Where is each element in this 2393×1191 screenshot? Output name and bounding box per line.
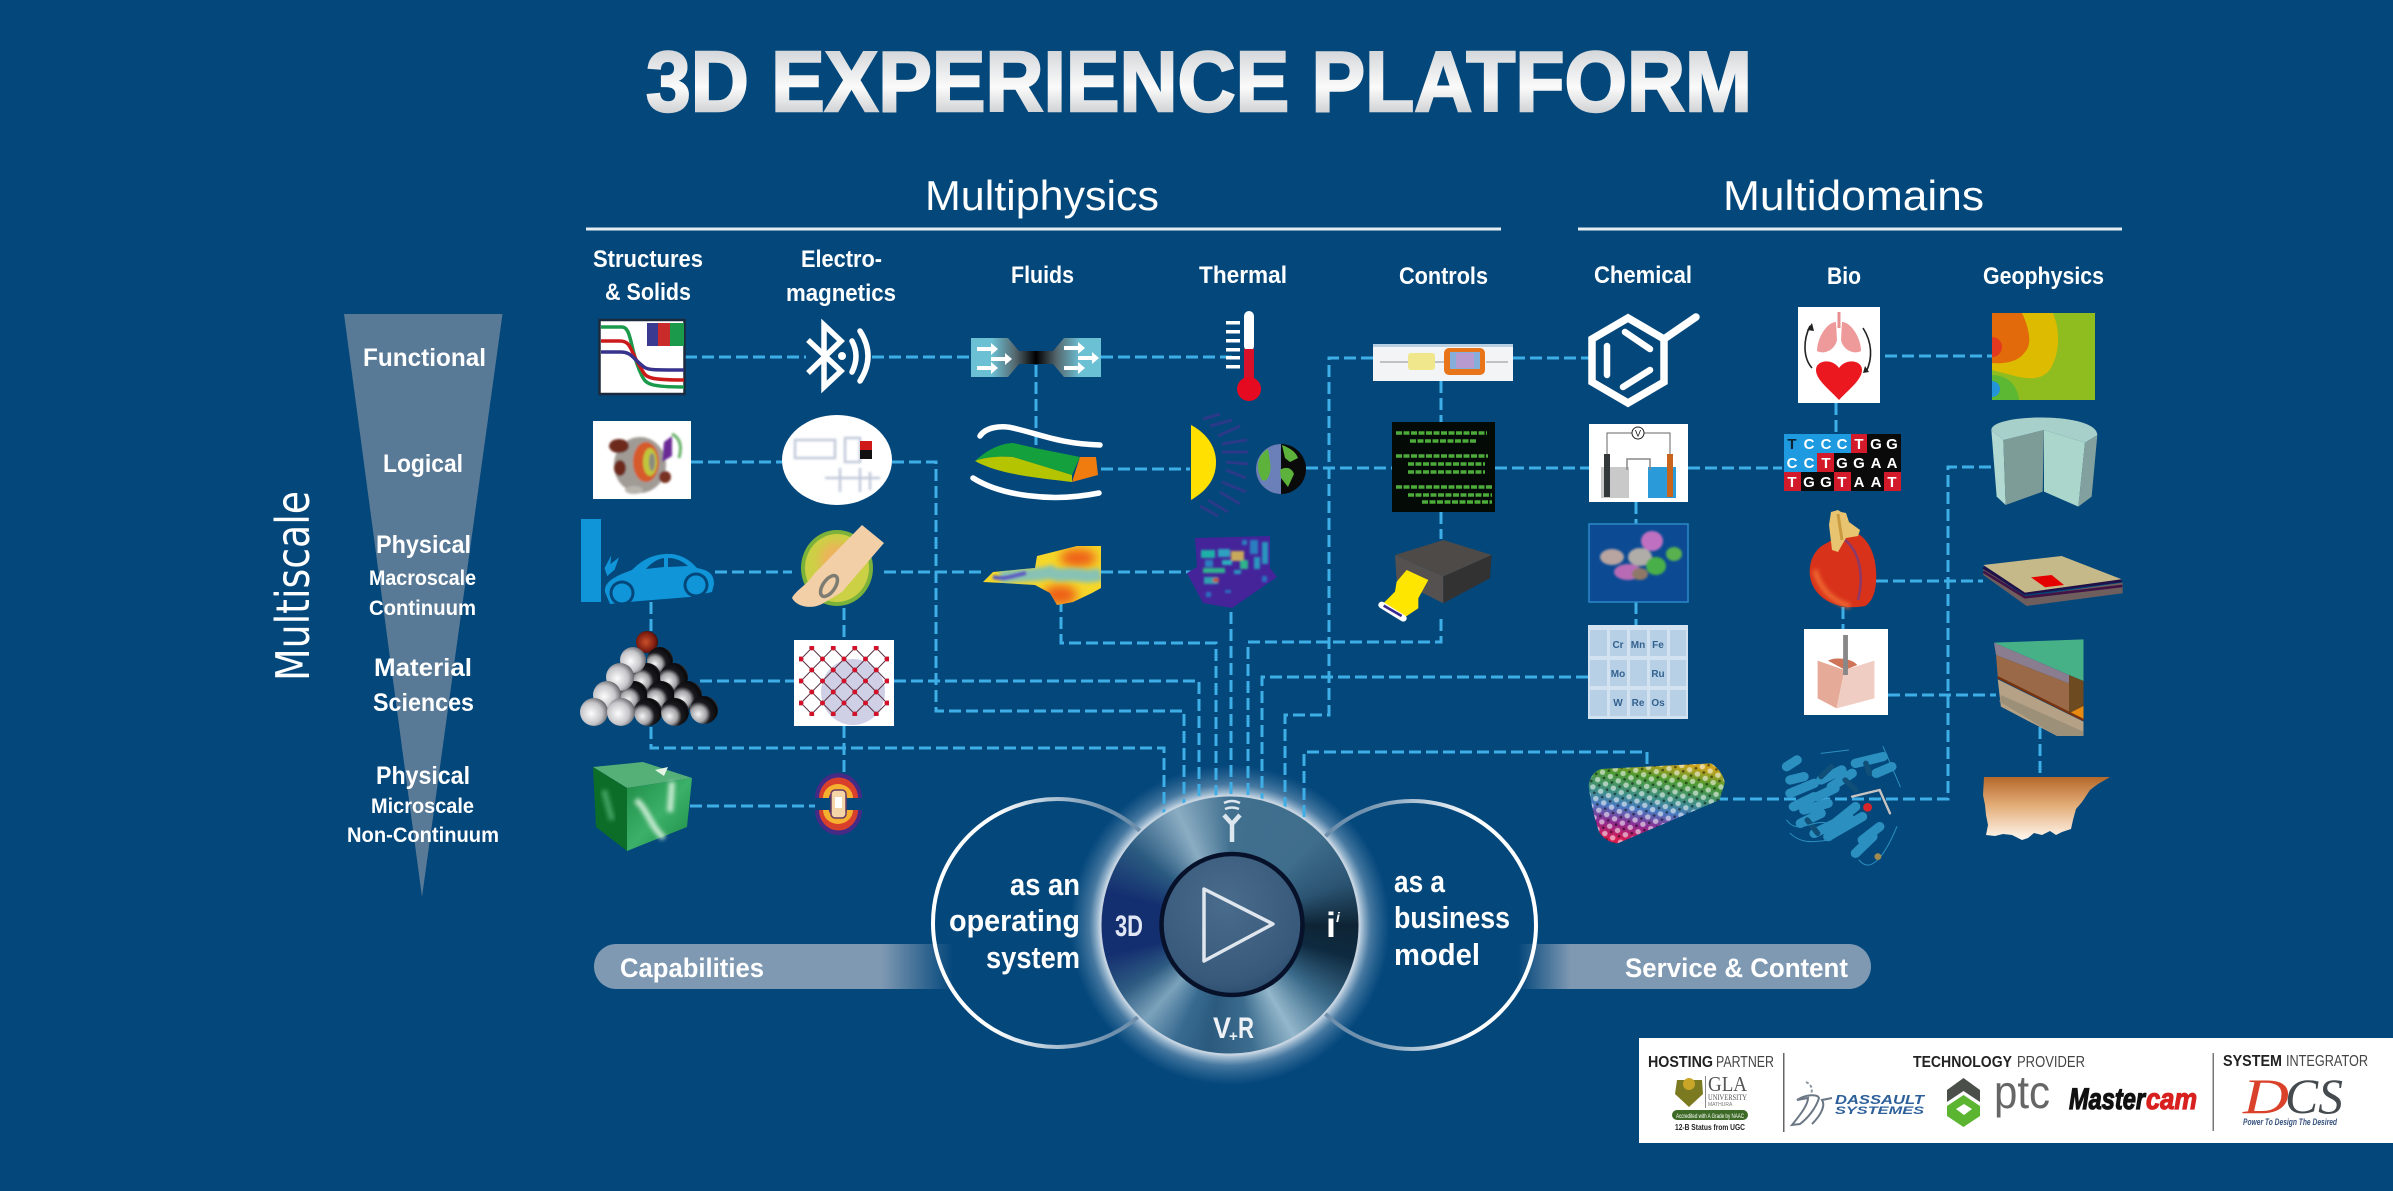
multiscale funnel with levels: Macroscale — [369, 567, 476, 590]
icon: DNA sequence: T — [1854, 436, 1864, 453]
icon: DNA sequence: G — [1803, 474, 1815, 491]
compass label V+R: + — [1229, 1028, 1238, 1045]
logo: Mastercam: Master — [2069, 1083, 2147, 1116]
column headers: magnetics — [786, 280, 896, 307]
icon: structures chart — [600, 320, 684, 394]
compass label iI — [1326, 906, 1341, 945]
icon: periodic table: Mo — [1611, 669, 1625, 680]
hosting partner heading: PARTNER — [1716, 1054, 1774, 1071]
system integrator heading: SYSTEM — [2223, 1053, 2282, 1070]
icon: sphere pyramid — [580, 631, 718, 726]
hosting partner heading: HOSTING — [1648, 1054, 1713, 1071]
circle: as a business model — [1288, 801, 1536, 1049]
logo: GLA University: 12-B Status from UGC — [1675, 1122, 1745, 1132]
icon: electromagnetic lobes — [815, 773, 862, 835]
column headers: Chemical — [1594, 262, 1692, 289]
multiscale funnel with levels — [344, 314, 502, 897]
icon: copper terrain map — [1983, 777, 2110, 840]
dashed connectors — [651, 356, 2040, 822]
technology provider heading: TECHNOLOGY — [1913, 1054, 2013, 1071]
system integrator heading: INTEGRATOR — [2286, 1053, 2368, 1070]
column headers: Bio — [1827, 263, 1861, 290]
circle: as a business model: as a — [1394, 864, 1446, 899]
logo: GLA University: UNIVERSITY — [1708, 1093, 1747, 1102]
column headers: & Solids — [605, 279, 691, 306]
column headers: Fluids — [1011, 262, 1074, 289]
service and content pill — [1518, 944, 1871, 989]
compass glow — [1070, 765, 1390, 1085]
icon: electrochemical cell — [1589, 424, 1688, 502]
compass disc — [1100, 795, 1360, 1055]
icon: fluid nozzle — [971, 338, 1101, 377]
system integrator heading — [2223, 1053, 2368, 1070]
column headers: Controls — [1399, 263, 1488, 290]
compass label 3D: 3D — [1115, 910, 1143, 943]
circle: as a business model: business — [1394, 900, 1510, 935]
logo: Dassault Systemes: SYSTEMES — [1835, 1105, 1925, 1117]
multiscale funnel with levels: Sciences — [373, 689, 474, 717]
logo: DCS: D — [2242, 1068, 2289, 1124]
icon: thermometer — [1226, 311, 1261, 401]
partner logo panel — [1639, 1038, 2393, 1143]
circle: as an operating system — [933, 799, 1181, 1047]
icon: periodic table — [1588, 625, 1688, 719]
service and content pill: Service & Content — [1625, 953, 1848, 983]
icon: DNA sequence: A — [1871, 474, 1882, 491]
circle: as an operating system: system — [986, 940, 1080, 975]
icon: periodic table: Fe — [1652, 640, 1664, 651]
column headers: Geophysics — [1983, 263, 2104, 290]
icon: periodic table: Re — [1632, 698, 1645, 709]
icon: periodic table: W — [1613, 698, 1623, 709]
icon: geophysics heatmap — [1982, 313, 2095, 400]
icon: periodic table: Ru — [1651, 669, 1665, 680]
logo: ptc: ptc — [1994, 1066, 2050, 1118]
compass hub with play triangle — [1162, 854, 1302, 995]
icon: control block diagram — [1373, 344, 1513, 381]
icon: layered plate — [1983, 556, 2123, 606]
technology provider heading — [1913, 1054, 2085, 1071]
icon: green cube — [593, 762, 692, 851]
heading: Multidomains — [1578, 172, 2122, 230]
icon: DNA sequence: G — [1853, 455, 1865, 472]
logo: DCS — [2242, 1068, 2343, 1127]
icon: benzene — [1592, 317, 1696, 403]
icon: geology section — [1994, 639, 2084, 736]
icon: airfoil — [973, 427, 1100, 497]
icon: turbine white tile — [593, 421, 691, 499]
icon: DNA sequence — [1784, 434, 1901, 491]
compass label iI: i — [1326, 906, 1336, 945]
logo: GLA University: Accredited with A Grade by NAAC — [1676, 1113, 1744, 1120]
multiscale funnel with levels: Non-Continuum — [347, 824, 499, 847]
logo: GLA University: MATHURA — [1708, 1102, 1733, 1108]
icon: soil block tile — [1804, 629, 1888, 715]
icon: DNA sequence: C — [1804, 455, 1815, 472]
title: 3D EXPERIENCE PLATFORM — [646, 35, 1752, 130]
icon: DNA sequence: T — [1887, 474, 1897, 491]
column headers — [593, 246, 2104, 307]
icon: wing heat map — [983, 546, 1101, 605]
compass label V+R: R — [1238, 1012, 1254, 1045]
icon: heart and lungs — [1798, 307, 1880, 403]
column headers: Thermal — [1199, 262, 1287, 289]
icon: DNA sequence: C — [1787, 455, 1798, 472]
icon: periodic table: Os — [1651, 698, 1665, 709]
compass label V+R: V — [1213, 1012, 1231, 1045]
icon: DNA sequence: G — [1836, 455, 1848, 472]
compass label V+R — [1213, 1012, 1254, 1045]
heading: Multiphysics: Multiphysics — [925, 172, 1159, 219]
icon: DNA sequence: T — [1821, 455, 1831, 472]
icon: DNA sequence: C — [1821, 436, 1832, 453]
icon: DNA sequence: C — [1804, 436, 1815, 453]
circle: as an operating system: operating — [949, 903, 1080, 938]
capabilities pill: Capabilities — [620, 953, 764, 983]
icon: DNA sequence: A — [1887, 455, 1898, 472]
logo: Dassault Systemes — [1792, 1082, 1926, 1125]
icon: periodic table: Cr — [1612, 640, 1624, 651]
icon: cut cylinder — [1991, 417, 2097, 507]
icon: periodic table: Mn — [1631, 640, 1645, 651]
compass antenna icon — [1224, 801, 1240, 842]
icon: DNA sequence: T — [1787, 436, 1797, 453]
multiscale funnel with levels: Material — [374, 654, 472, 682]
icon: wrist field simulation — [792, 525, 884, 607]
hosting partner heading — [1648, 1054, 1774, 1071]
technology provider heading: PROVIDER — [2017, 1054, 2085, 1071]
multiscale funnel with levels: Microscale — [371, 795, 474, 818]
logo: Mastercam: cam — [2146, 1083, 2197, 1116]
icon: protein ribbon — [1787, 747, 1900, 865]
icon: crystal lattice — [794, 640, 894, 726]
icon: DNA sequence: G — [1870, 436, 1882, 453]
compass label iI: i — [1336, 909, 1341, 925]
icon: car crash — [581, 519, 714, 606]
circle: as an operating system: as an — [1010, 867, 1080, 902]
icon: DNA sequence: T — [1837, 474, 1847, 491]
heading: Multidomains: Multidomains — [1723, 172, 1984, 219]
icon: DNA sequence: A — [1871, 455, 1882, 472]
icon: anatomical heart — [1810, 510, 1876, 607]
icon: DNA sequence: G — [1886, 436, 1898, 453]
icon: sun and earth radiation — [1191, 414, 1306, 516]
icon: code screen — [1392, 422, 1495, 512]
capabilities pill — [594, 944, 953, 989]
icon: DNA sequence: C — [1837, 436, 1848, 453]
multiscale funnel with levels: Physical — [376, 762, 470, 790]
icon: DNA sequence: A — [1854, 474, 1865, 491]
logo: ptc — [1947, 1066, 2050, 1127]
logo: Dassault Systemes: DASSAULT — [1835, 1093, 1926, 1107]
multiscale funnel with levels: Physical — [376, 531, 471, 559]
multiscale funnel with levels: Functional — [363, 344, 486, 372]
heading: Multiphysics — [586, 172, 1501, 230]
icon: electrochemical cell: V — [1635, 428, 1641, 438]
multiscale label: Multiscale — [266, 491, 320, 681]
icon: chip box with ribbon — [1382, 540, 1492, 618]
icon: DNA sequence: G — [1820, 474, 1832, 491]
circle: as a business model: model — [1394, 937, 1480, 972]
column headers: Structures — [593, 246, 703, 273]
icon: circuit schematic — [782, 415, 892, 505]
icon: bluetooth — [808, 325, 868, 387]
logo: GLA University: GLA — [1708, 1072, 1748, 1096]
logo: DCS: Power To Design The Desired — [2243, 1117, 2337, 1127]
icon: nanotube — [1589, 763, 1725, 843]
logo: DCS: CS — [2285, 1068, 2343, 1124]
logo: GLA University — [1672, 1072, 1748, 1132]
icon: DNA sequence: T — [1787, 474, 1797, 491]
multiscale funnel with levels: Continuum — [369, 597, 476, 620]
column headers: Electro- — [801, 246, 882, 273]
icon: molecule tile — [1589, 524, 1688, 602]
icon: thermal field — [1187, 536, 1277, 608]
multiscale funnel with levels: Logical — [383, 450, 463, 478]
